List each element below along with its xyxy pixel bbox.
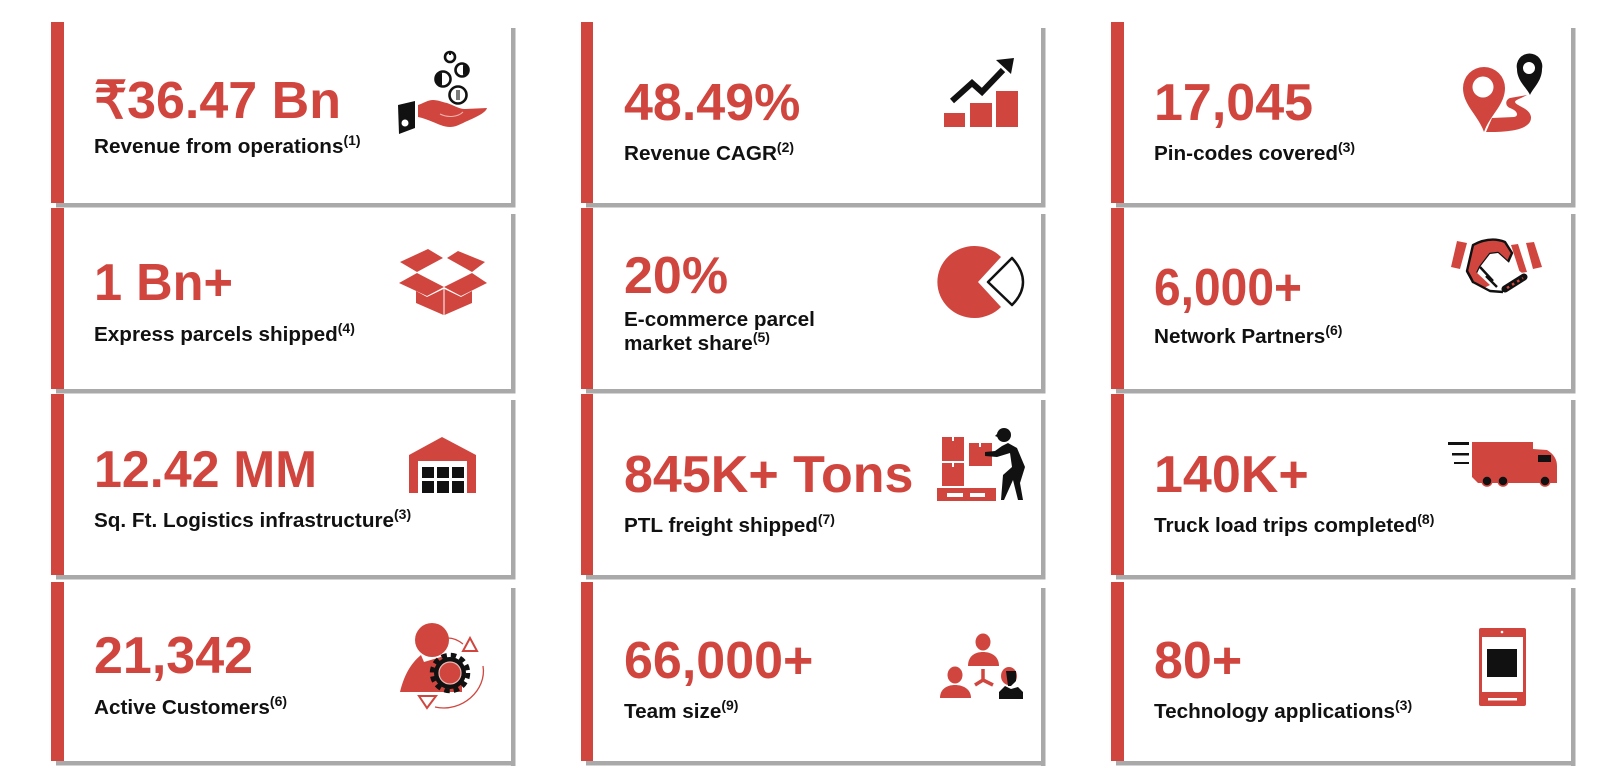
heading: team value: 66,000+ [624,632,813,690]
panel: logistics infrastructure [51,394,516,580]
panel: team size [581,582,1046,766]
text: infrastructure label: Sq. Ft. Logistics infrastructure [94,509,394,532]
text: CAGR label: Revenue CAGR [624,142,777,165]
text: CAGR label: (2) [777,139,794,155]
panel: active customers [51,582,516,766]
icon: handshake [1451,240,1542,292]
text: revenue label: (1) [343,132,361,148]
heading: freight value: 845K+ Tons [624,446,913,504]
text: team label: Team size [624,700,721,723]
heading: pin-codes value: 17,045 [1154,74,1313,132]
heading: customers value: 21,342 [94,627,253,685]
panel: revenue CAGR [581,22,1046,208]
text: applications label: Technology applications [1154,700,1395,723]
icon: warehouse [409,437,476,493]
icon: team network [940,634,1023,699]
icon: map pins [1463,53,1542,132]
heading: market share value: 20% [624,247,728,305]
panel: express parcels shipped [51,208,516,394]
heading: revenue value: ₹36.47 Bn [94,72,341,130]
heading: applications value: 80+ [1154,632,1242,690]
text: pin-codes label: (3) [1338,139,1355,155]
text: team label: (9) [721,697,738,713]
text: infrastructure label: (3) [394,506,411,522]
panel: pin-codes covered [1111,22,1576,208]
text: trips label: (8) [1417,511,1434,527]
text: trips label: Truck load trips completed [1154,514,1417,537]
text: market share label: E-commerce parcel [624,308,815,331]
heading: partners value: 6,000+ [1154,259,1302,317]
icon: hand with coins [398,52,487,134]
text: freight label: PTL freight shipped [624,514,818,537]
icon: truck [1448,442,1557,486]
panel: technology applications [1111,582,1576,766]
icon: rising bar chart [944,58,1018,127]
heading: CAGR value: 48.49% [624,74,800,132]
icon: smartphone [1479,628,1526,706]
text: customers label: Active Customers [94,696,270,719]
heading: parcels value: 1 Bn+ [94,254,233,312]
text: pin-codes label: Pin-codes covered [1154,142,1338,165]
icon: open box [399,249,487,315]
text: customers label: (6) [270,693,287,709]
panel: network partners [1111,208,1576,394]
text: partners label: Network Partners [1154,325,1325,348]
text: partners label: (6) [1325,322,1342,338]
text: parcels label: (4) [338,320,355,336]
panel: PTL freight [581,394,1046,580]
text: parcels label: Express parcels shipped [94,323,338,346]
heading: infrastructure value: 12.42 MM [94,441,317,499]
text: market share label: (5) [753,329,770,345]
icon: pie chart [937,246,1023,318]
panel: revenue from operations [51,22,516,208]
text: revenue label: Revenue from operations [94,135,343,158]
heading: trips value: 140K+ [1154,446,1309,504]
panel: market share [581,208,1046,394]
panel: truck load trips [1111,394,1576,580]
text: market share label: market share [624,332,753,355]
icon: worker with pallet [937,428,1025,501]
icon: person with gear [400,623,483,708]
text: applications label: (3) [1395,697,1412,713]
text: freight label: (7) [818,511,835,527]
